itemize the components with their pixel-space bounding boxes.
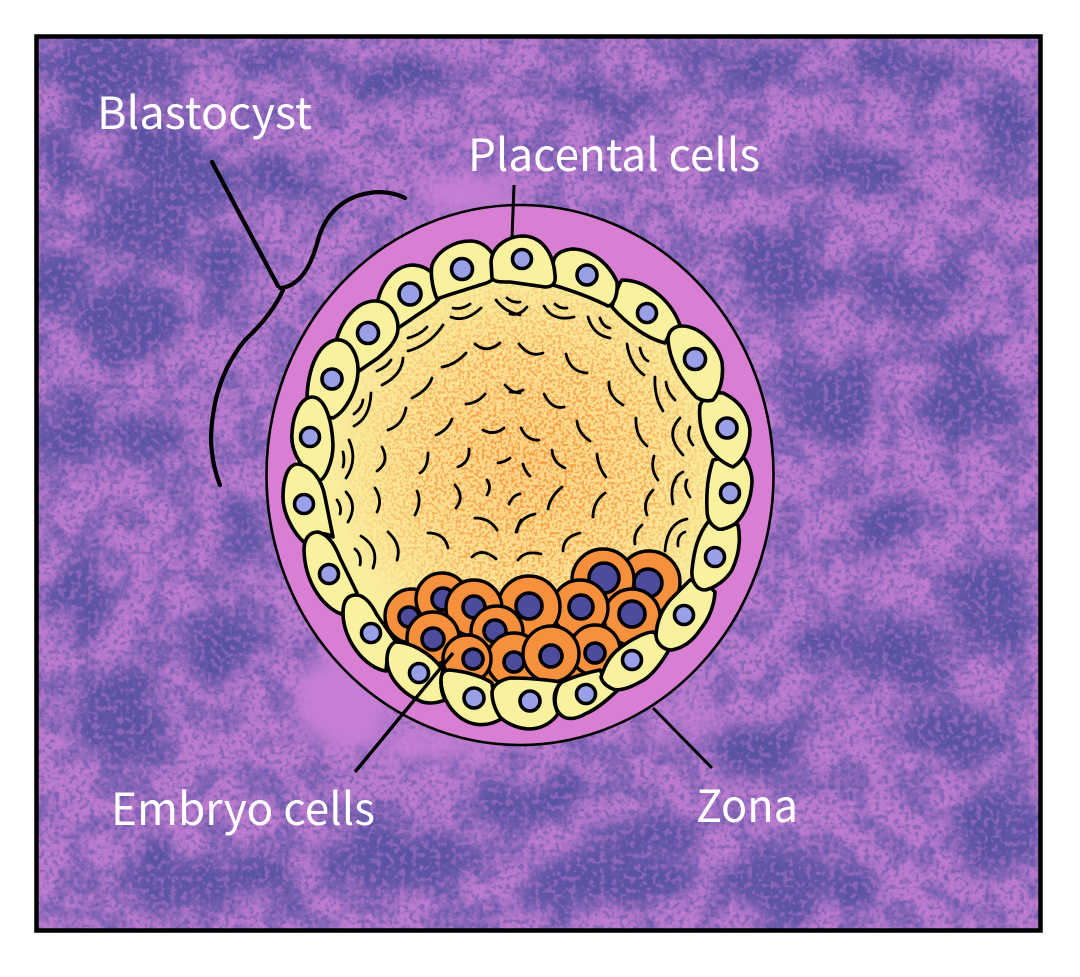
pointer: blastocyst bracket bbox=[211, 162, 405, 485]
placental cell bbox=[601, 632, 669, 690]
embryo cell bbox=[385, 589, 439, 643]
placental cell bbox=[431, 241, 497, 299]
placental cell bbox=[612, 280, 680, 343]
label: Embryo cells: Embryo cells bbox=[111, 773, 375, 838]
placental cell bbox=[283, 464, 333, 543]
embryo cell bbox=[552, 580, 608, 636]
label: Blastocyst: Blastocyst bbox=[97, 77, 312, 142]
placental cell bbox=[292, 397, 333, 481]
label: Placental cells: Placental cells bbox=[468, 119, 760, 184]
placental cell bbox=[692, 521, 739, 590]
zona ring bbox=[266, 205, 774, 745]
placental cell bbox=[555, 670, 618, 718]
embryo cell bbox=[416, 573, 468, 625]
blastocyst diagram bbox=[266, 205, 774, 745]
placental cell bbox=[304, 532, 357, 614]
placental cell bbox=[668, 326, 723, 401]
label: Zona: Zona bbox=[696, 770, 798, 835]
placental cell bbox=[700, 393, 750, 467]
cavity arc marks bbox=[337, 298, 693, 568]
placental cell bbox=[378, 265, 441, 328]
placental cell bbox=[707, 457, 752, 529]
placental cell bbox=[656, 580, 715, 650]
embryo cell bbox=[487, 633, 541, 687]
placental cell bbox=[387, 642, 445, 703]
embryo cell bbox=[604, 589, 660, 645]
placental cell bbox=[307, 340, 358, 418]
blastocoel cavity bbox=[295, 268, 739, 692]
embryo cell bbox=[498, 576, 560, 638]
embryo cell bbox=[446, 580, 502, 636]
embryo cell bbox=[572, 549, 634, 611]
pointer: zona bbox=[653, 708, 712, 768]
placental cell bbox=[337, 301, 398, 371]
embryo cell bbox=[618, 551, 680, 613]
embryo cell bbox=[443, 635, 491, 683]
placental cell bbox=[441, 670, 503, 725]
placental cell bbox=[492, 678, 561, 729]
placental cell bbox=[491, 236, 555, 287]
embryo cell bbox=[523, 626, 579, 682]
pointer: embryo cells bbox=[355, 653, 453, 772]
placental cell bbox=[553, 249, 617, 306]
embryo cell bbox=[570, 625, 620, 675]
embryo cell bbox=[407, 612, 459, 664]
pointer: placental cells bbox=[512, 185, 514, 238]
embryo cell cluster bbox=[385, 549, 680, 687]
embryo cell bbox=[471, 606, 523, 658]
placental cell bbox=[343, 595, 396, 671]
placental cell ring bbox=[283, 236, 752, 729]
